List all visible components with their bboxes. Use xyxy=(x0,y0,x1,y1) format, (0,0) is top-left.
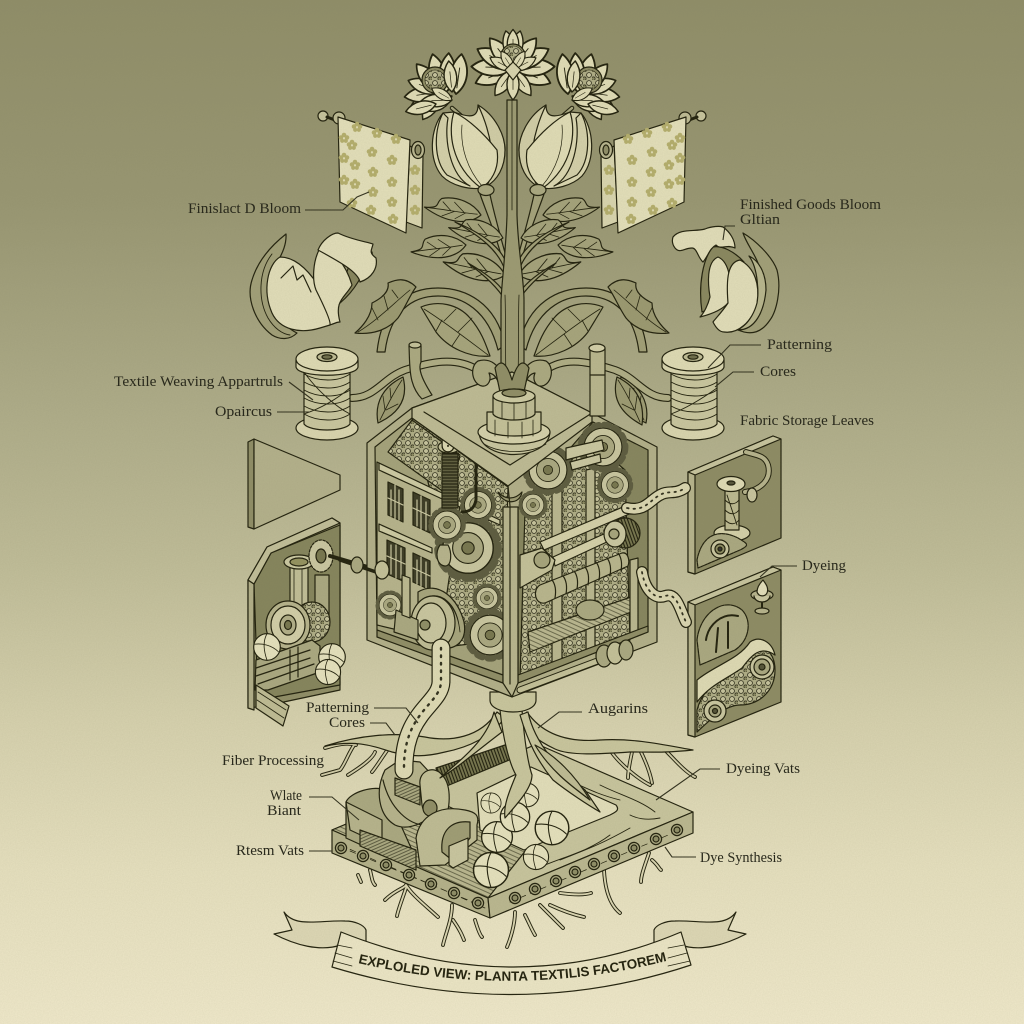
central flower xyxy=(471,29,555,100)
building wall xyxy=(377,462,460,640)
petals xyxy=(267,257,333,331)
bearing block xyxy=(437,545,451,566)
label: dye synthesis: Dye Synthesis xyxy=(700,850,782,866)
tail right xyxy=(654,912,746,948)
frame posts base xyxy=(394,610,418,640)
right interior xyxy=(518,422,648,683)
label: gltian: Gltian xyxy=(740,212,781,228)
ribbon connector lower right xyxy=(642,572,686,622)
lathe stand xyxy=(402,575,410,618)
roof texture xyxy=(388,420,460,495)
foliage leaves xyxy=(423,193,483,226)
arch clamp xyxy=(416,809,478,866)
inner leaf xyxy=(421,304,490,356)
fleur collar xyxy=(473,360,551,392)
label: opaircus: Opaircus xyxy=(215,404,272,420)
label: wlate: Wlate xyxy=(270,788,302,804)
belt and volute xyxy=(697,534,747,568)
ledge upper xyxy=(379,463,500,525)
front left edge xyxy=(332,830,490,918)
title text: EXPLOLED VIEW: PLANTA TEXTILIS FACTOREM xyxy=(358,952,666,981)
gears right xyxy=(526,448,570,492)
top surface xyxy=(332,744,693,898)
ledge lower xyxy=(379,524,432,553)
connecting shaft left xyxy=(340,557,389,579)
crank housing xyxy=(379,760,446,827)
floor strip right xyxy=(518,626,648,683)
arched branch xyxy=(377,288,505,352)
flat bed bar xyxy=(528,596,636,652)
pool xyxy=(477,767,618,850)
title path text xyxy=(358,960,670,981)
towel rack xyxy=(318,111,424,233)
flywheel xyxy=(411,588,465,650)
bolts xyxy=(335,824,683,909)
spool inside xyxy=(714,525,750,541)
label: cores lower: Cores xyxy=(329,715,365,731)
central bobbin xyxy=(478,389,550,454)
small gears lower right xyxy=(576,600,604,620)
label: finished goods bloom: Finished Goods Bloom xyxy=(740,197,882,213)
worm screw xyxy=(436,744,514,788)
label: textile weaving: Textile Weaving Appartruls xyxy=(114,374,283,390)
ridged roller xyxy=(535,553,629,603)
branch to tulip xyxy=(480,190,507,280)
cotton cluster xyxy=(474,783,569,888)
label: augarins: Augarins xyxy=(588,701,648,717)
axle lower right xyxy=(520,640,633,690)
broken plank xyxy=(256,685,289,726)
ribbon connector upper right xyxy=(627,488,685,509)
cloth sheet xyxy=(697,639,775,702)
exploded panel: lower right xyxy=(688,567,781,737)
machine parts xyxy=(290,562,308,614)
label: finished bloom left: Finislact D Bloom xyxy=(188,201,302,217)
side flower xyxy=(403,52,482,134)
pipes from bobbin xyxy=(462,418,484,512)
floor strip left xyxy=(377,630,503,683)
base platform xyxy=(332,692,693,918)
gears bed left xyxy=(412,418,508,650)
side post right xyxy=(630,558,638,634)
under-plate roots xyxy=(358,853,661,947)
left interior xyxy=(375,418,508,683)
grain lines xyxy=(340,830,680,908)
vine right xyxy=(546,362,668,398)
band xyxy=(332,932,691,995)
big wheel xyxy=(697,605,748,665)
spool: right xyxy=(662,347,724,440)
lock bracket xyxy=(449,838,468,868)
top slab xyxy=(412,372,592,486)
factory cube xyxy=(340,372,657,697)
small lower leaf xyxy=(377,377,405,423)
ribbon down to press xyxy=(404,648,441,770)
cotton boll: left xyxy=(250,233,376,339)
pulley right xyxy=(610,518,640,548)
arch leaf xyxy=(355,280,416,333)
side root twigs xyxy=(322,740,695,785)
clevis xyxy=(520,548,555,588)
stem branches xyxy=(468,263,505,300)
ribbon inside cube xyxy=(448,394,477,446)
chain belt xyxy=(697,648,775,732)
central roots over pool xyxy=(500,710,532,818)
panel: plant upper half left xyxy=(318,52,508,423)
shafts upper right xyxy=(566,440,604,470)
label: biant: Biant xyxy=(267,803,301,819)
spring column xyxy=(442,453,458,508)
central stem xyxy=(501,100,524,385)
label: cores right: Cores xyxy=(760,364,796,380)
label: fabric storage: Fabric Storage Leaves xyxy=(740,413,874,429)
cotton boll: right xyxy=(672,226,779,333)
label: dyeing vats: Dyeing Vats xyxy=(726,761,800,777)
gears left xyxy=(439,519,497,577)
front right edge xyxy=(488,812,693,918)
exploded panel: upper right xyxy=(688,436,781,574)
vertical struts right xyxy=(552,468,595,668)
press block xyxy=(395,778,420,805)
husk xyxy=(250,234,297,339)
machine blocks xyxy=(346,788,416,870)
vine left xyxy=(352,362,478,398)
dye stream lines xyxy=(545,780,660,865)
goblet xyxy=(751,590,773,600)
label: fiber processing: Fiber Processing xyxy=(222,753,324,769)
tail left xyxy=(274,912,366,948)
front post xyxy=(503,507,518,697)
exploded panel: lower left xyxy=(248,518,378,726)
crank wheel xyxy=(420,770,449,817)
leader lines xyxy=(277,192,797,857)
right machinery bed xyxy=(520,440,630,680)
label: rtesm vats: Rtesm Vats xyxy=(236,843,304,859)
windows xyxy=(387,482,430,590)
rods right xyxy=(540,504,634,550)
spool: left xyxy=(296,347,358,440)
spring cap xyxy=(438,441,460,453)
hatched deck xyxy=(332,793,530,898)
tubes behind cube xyxy=(409,342,605,416)
title banner xyxy=(273,911,747,996)
plant upper half right xyxy=(516,52,706,423)
roll shading xyxy=(333,945,690,966)
side roots xyxy=(325,712,693,756)
label: patterning lower: Patterning xyxy=(306,700,369,716)
outer frame xyxy=(367,372,657,697)
label: patterning right: Patterning xyxy=(767,337,832,353)
exploded panel: top left wedge xyxy=(248,439,340,529)
tulip xyxy=(432,105,505,196)
small lower leaf right xyxy=(615,377,643,425)
collar xyxy=(490,692,536,712)
label: dyeing: Dyeing xyxy=(802,558,846,574)
connector rod xyxy=(330,556,378,570)
